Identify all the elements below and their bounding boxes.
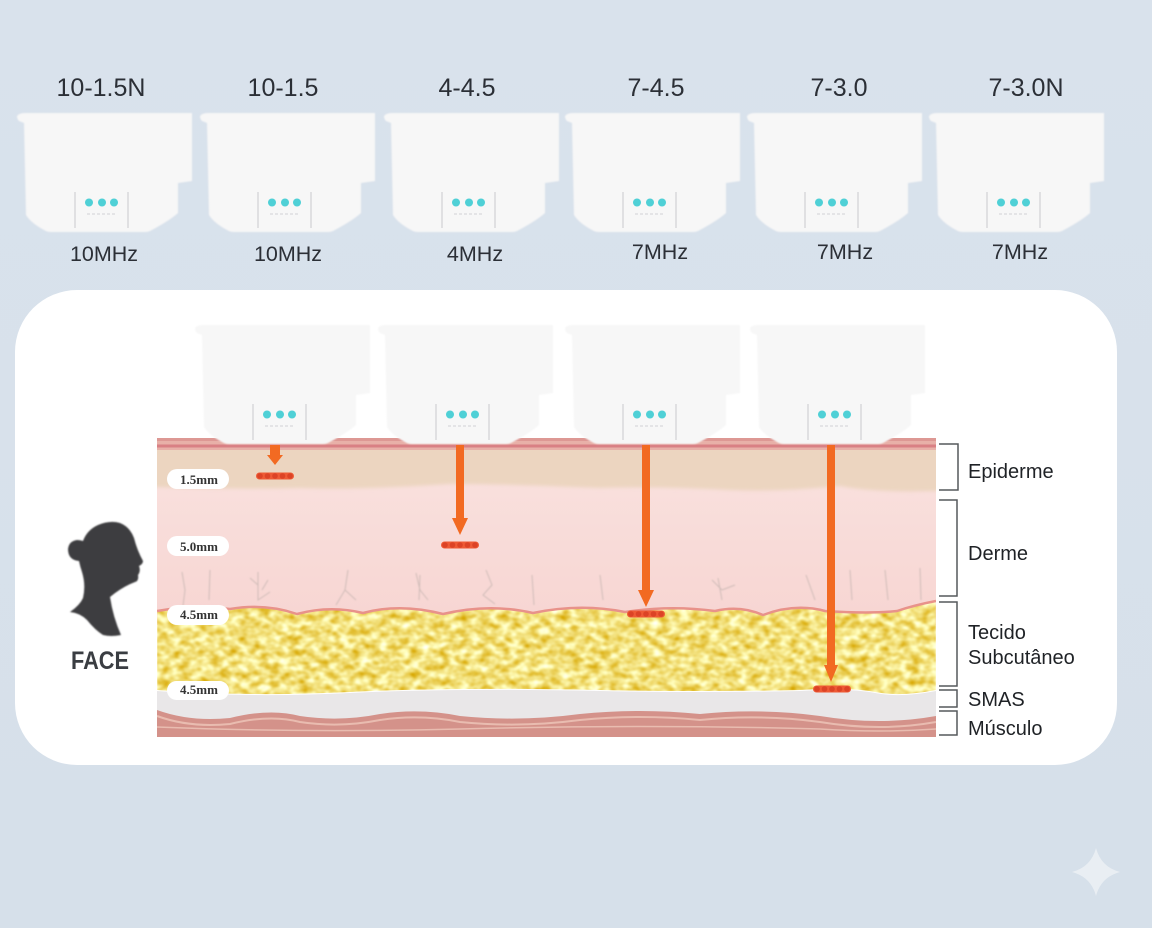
cartridge 4-4.5: 4-4.5: [439, 74, 495, 102]
cartridge 7-3.0N: 7MHz: [992, 240, 1048, 264]
cartridge 7-3.0N: [929, 74, 1104, 264]
cartridge 7-4.5: [565, 74, 740, 264]
layer label: Tecido Subcutaneo: Subcutâneo: [968, 647, 1075, 669]
label: FACE: FACE: [71, 647, 129, 675]
cartridge 7-3.0: 7MHz: [817, 240, 873, 264]
cartridge 10-1.5: 10MHz: [254, 242, 322, 266]
icon: face silhouette: [68, 522, 143, 636]
depth label 1.5mm: 1.5mm: [180, 472, 218, 487]
depth label 4.5mm upper: 4.5mm: [180, 607, 218, 622]
cartridge 10-1.5: 10-1.5: [248, 74, 318, 102]
cartridge 7-3.0N: 7-3.0N: [988, 74, 1064, 102]
depth label 1.5mm: [167, 469, 229, 489]
arrow: 4.5 mm to fat: [627, 445, 665, 618]
arrow: 1.5 mm: [256, 445, 294, 480]
layer label: Tecido Subcutaneo: [939, 602, 1075, 686]
cartridge 7-4.5: 7-4.5: [628, 74, 684, 102]
arrow: 4.5 mm to SMAS: [813, 445, 851, 692]
cartridge 4-4.5: 4MHz: [447, 242, 503, 266]
SMAS layer: [157, 690, 936, 722]
layer label: Musculo: Músculo: [968, 718, 1042, 740]
layer label: Tecido Subcutaneo: Tecido: [968, 622, 1026, 644]
cartridge 4-4.5: [384, 74, 559, 266]
layer label: Musculo: [939, 711, 1042, 740]
top row: cartridge catalogue: [17, 74, 1104, 266]
layer label: Derme: [939, 500, 1028, 596]
arrow: 5.0 mm: [441, 445, 479, 548]
probe cartridges: [195, 325, 925, 444]
depth label 5.0mm: [167, 536, 229, 556]
cartridge 10-1.5: [200, 74, 375, 266]
epidermis layer: [157, 450, 936, 492]
cartridge 10-1.5N: [17, 74, 192, 266]
cartridge 7-3.0: 7-3.0: [811, 74, 867, 102]
fat layer: [157, 600, 936, 700]
layer label: Epiderme: [939, 444, 1054, 490]
skin cross-section: [130, 438, 960, 737]
cartridge 7-4.5: 7MHz: [632, 240, 688, 264]
cartridge 10-1.5N: 10-1.5N: [57, 74, 145, 102]
layer label: Derme: Derme: [968, 543, 1028, 565]
dermis layer: [157, 480, 936, 625]
depth label 4.5mm lower: [167, 681, 229, 700]
icon: sparkle: [1072, 848, 1120, 896]
skin surface band: [157, 438, 936, 450]
blood vessels: [182, 568, 921, 606]
layer label: SMAS: [939, 689, 1025, 711]
panel: skin depth diagram: [15, 290, 1117, 765]
cartridge 10-1.5N: 10MHz: [70, 242, 138, 266]
cartridge 7-3.0: [747, 74, 922, 264]
depth label 4.5mm lower: 4.5mm: [180, 682, 218, 697]
depth label 5.0mm: 5.0mm: [180, 539, 218, 554]
muscle layer: [157, 710, 936, 737]
fat upper membrane: [157, 601, 936, 615]
layer label: SMAS: SMAS: [968, 689, 1025, 711]
depth label 4.5mm upper: [167, 605, 229, 625]
layer label: Epiderme: Epiderme: [968, 461, 1054, 483]
